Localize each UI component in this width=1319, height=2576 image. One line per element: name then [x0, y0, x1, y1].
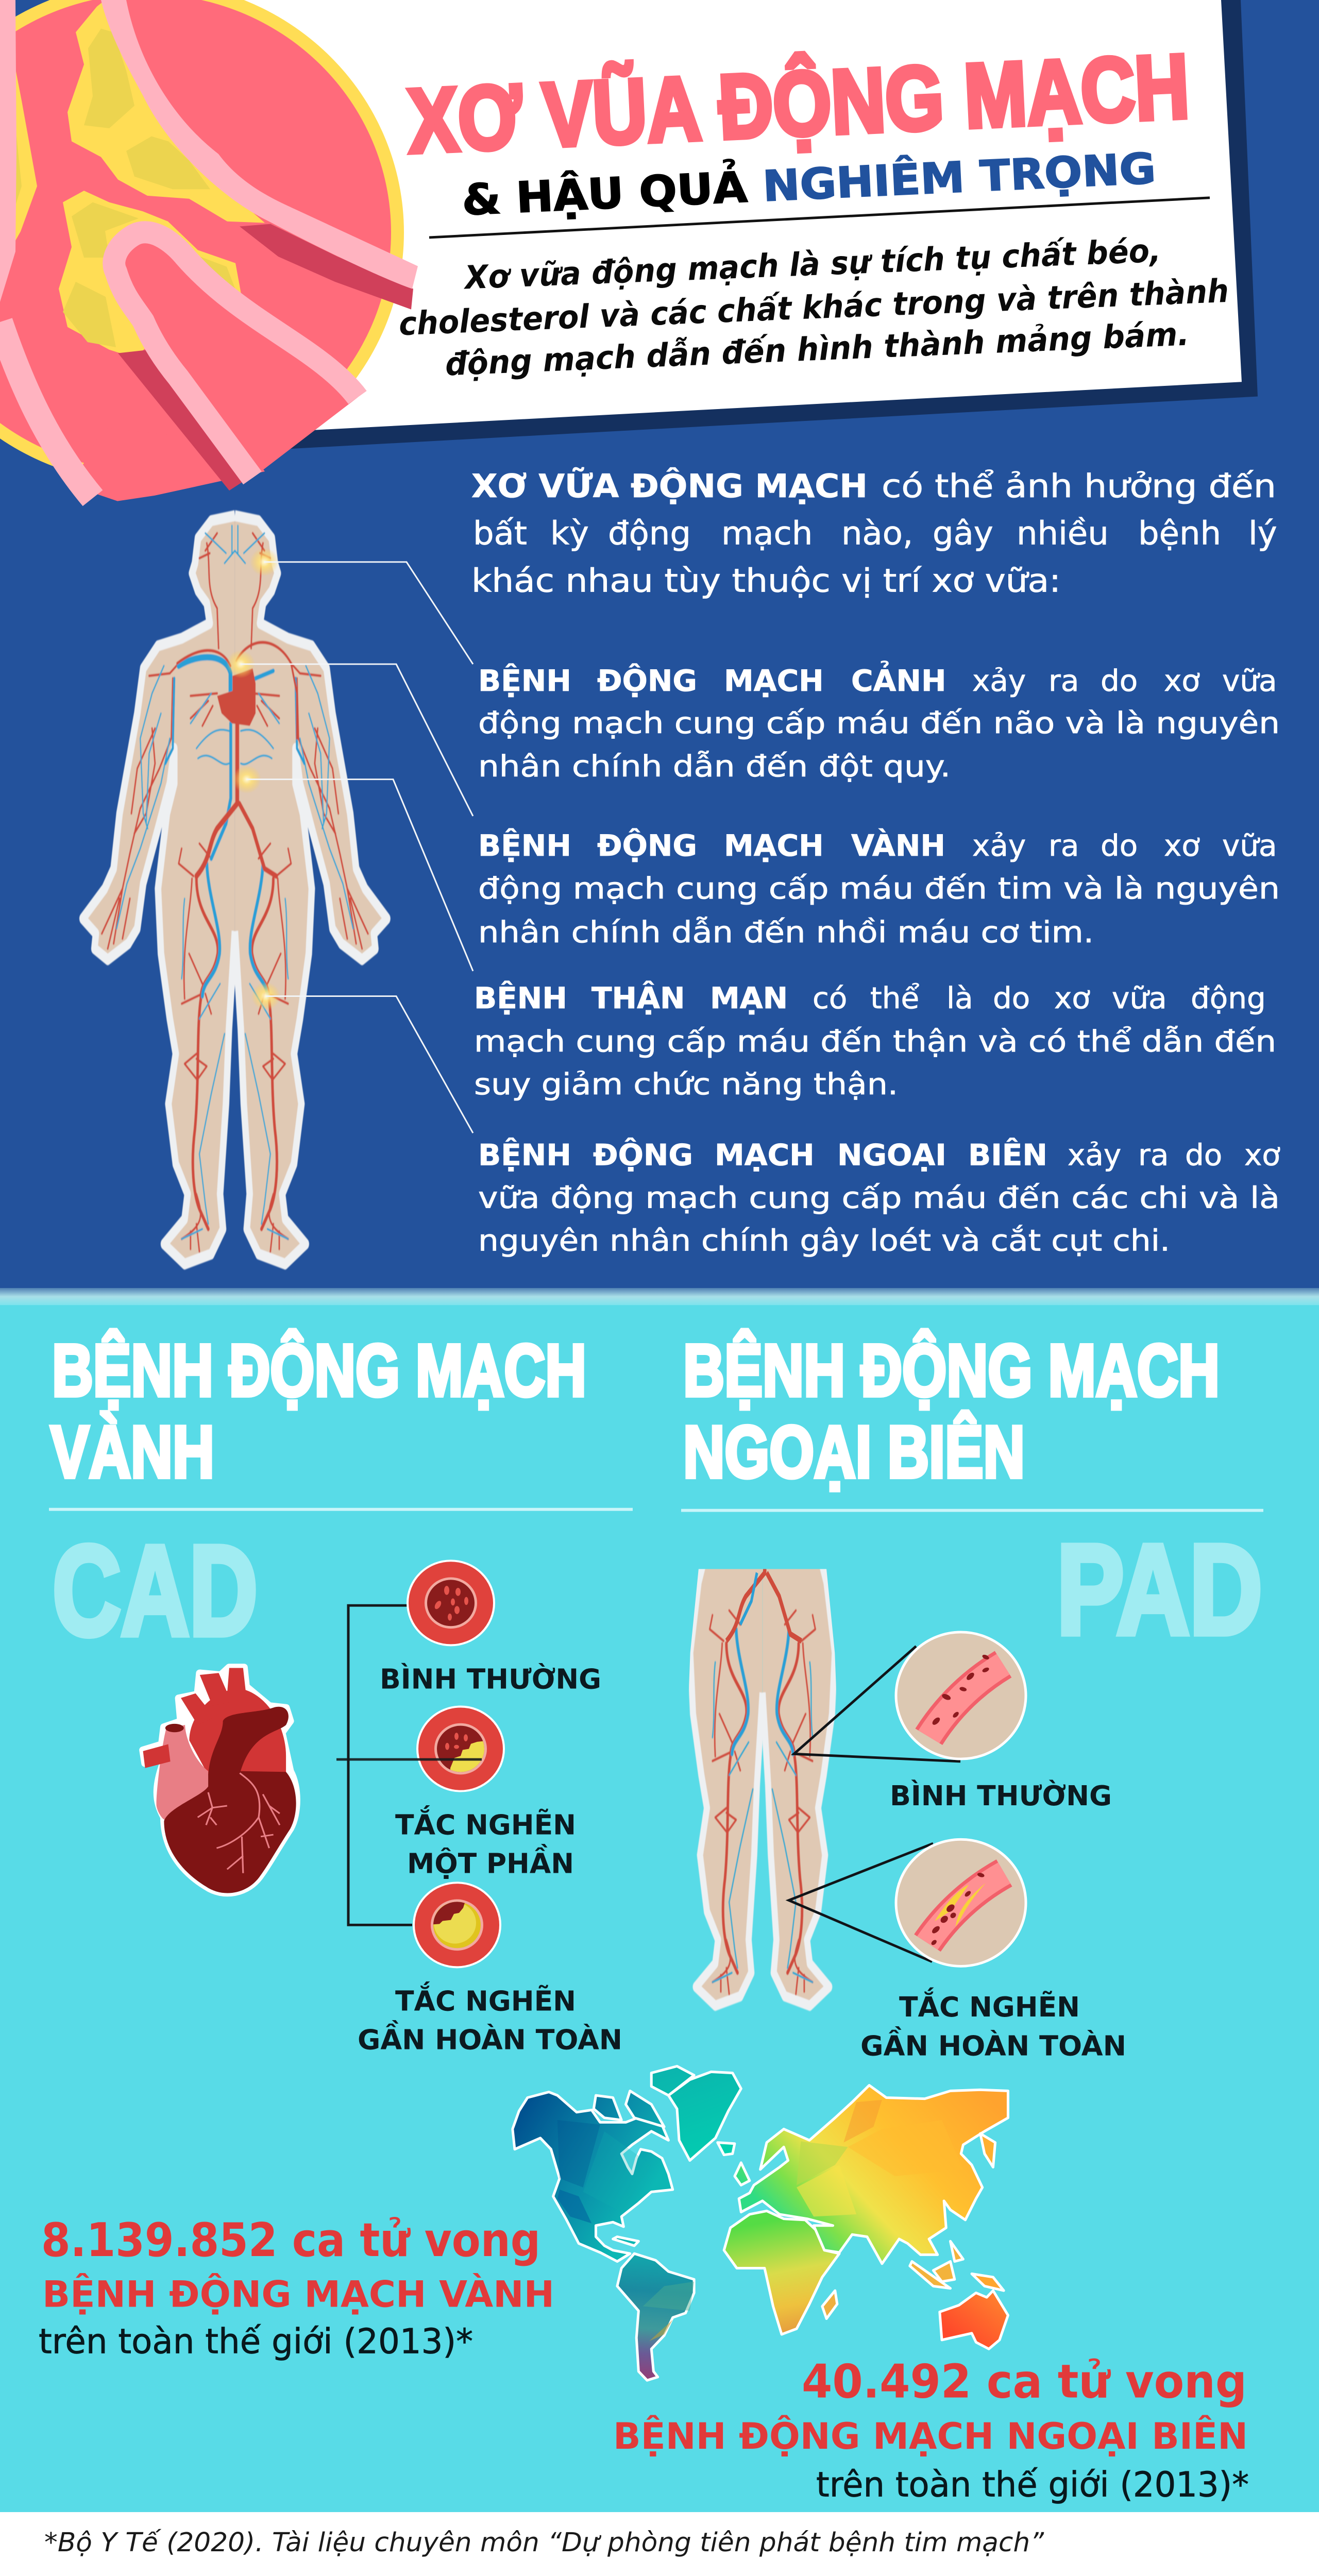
text block: peripheral artery disease: vữa động mạch cung cấp máu đến các chi và là	[478, 1181, 1280, 1215]
text block: intro paragraph: khác nhau tùy thuộc vị trí xơ vữa:	[471, 562, 1061, 599]
text block: renal artery disease: BỆNH	[474, 981, 567, 1015]
background: white footer band	[0, 2512, 1319, 2576]
text block: carotid artery disease: xảy	[972, 664, 1026, 698]
map: Southeast Asia islands	[910, 2241, 1004, 2291]
text block: renal artery disease: là	[946, 981, 973, 1015]
subtitle: & HẬU QUẢ NGHIÊM TRỌNG	[461, 139, 1157, 225]
text block: peripheral artery disease: do	[1185, 1138, 1222, 1173]
text block: carotid artery disease: nhân chính dẫn đến đột quy.	[478, 749, 951, 784]
stat: coronary deaths	[39, 2214, 554, 2361]
text block: intro paragraph: mạch	[721, 514, 813, 552]
label: near-total blockage (PAD): TẮC NGHẼN	[899, 1987, 1080, 2023]
stat: coronary deaths: 8.139.852 ca tử vong	[41, 2214, 540, 2267]
heading: peripheral artery disease	[683, 1329, 1220, 1493]
text block: intro paragraph: động	[608, 514, 691, 552]
zoom lines: legs to detail circles	[789, 1646, 960, 1962]
text block: peripheral artery disease: MẠCH	[715, 1138, 815, 1173]
stat: coronary deaths: trên toàn thế giới (2013)*	[39, 2321, 473, 2361]
icon: artery cross-section with plaque	[0, 0, 418, 501]
text block: renal artery disease: động	[1191, 981, 1266, 1015]
heading: peripheral artery disease: NGOẠI BIÊN	[683, 1411, 1025, 1493]
text block: renal artery disease: THẬN	[591, 981, 685, 1015]
text block: peripheral artery disease: NGOẠI	[837, 1138, 946, 1173]
text block: intro paragraph: kỳ	[550, 514, 589, 552]
text block: peripheral artery disease: BỆNH	[478, 1138, 571, 1173]
text block: carotid artery disease: xơ	[1164, 664, 1200, 698]
background: navy upper section	[0, 0, 1319, 1289]
label: near-total blockage (CAD): GẦN HOÀN TOÀN	[358, 2020, 622, 2056]
text block: intro paragraph	[471, 466, 1277, 599]
text block: intro paragraph: lý	[1248, 514, 1277, 552]
text block: renal artery disease: mạch cung cấp máu đến thận và có thể dẫn đến	[474, 1025, 1276, 1059]
text block: coronary artery disease: VÀNH	[851, 828, 945, 863]
stat: peripheral deaths	[613, 2355, 1249, 2505]
text block: carotid artery disease: do	[1101, 664, 1138, 698]
text block: peripheral artery disease: ĐỘNG	[593, 1138, 693, 1173]
intro text block: cholesterol và các chất khác trong và trên thành	[398, 272, 1229, 343]
detail circle: blocked peripheral artery	[896, 1839, 1026, 1966]
text block: carotid artery disease: vữa	[1222, 664, 1277, 698]
intro text block	[398, 231, 1229, 383]
text block: intro paragraph: bệnh	[1138, 514, 1221, 552]
map: Africa	[724, 2211, 839, 2334]
text block: coronary artery disease	[478, 828, 1280, 950]
text block: carotid artery disease: động mạch cung cấp máu đến não và là nguyên	[478, 706, 1280, 740]
label: near-total blockage (CAD): TẮC NGHẼN	[395, 1981, 576, 2017]
cross-section: nearly fully blocked artery	[414, 1883, 500, 1967]
header white panel	[155, 0, 1242, 443]
anatomy figure: human body with vessels	[82, 516, 387, 1264]
text block: coronary artery disease: vữa	[1222, 829, 1277, 863]
map: Eurasia	[735, 2086, 1008, 2264]
text block: intro paragraph: có thể ảnh hưởng đến	[882, 467, 1276, 505]
label: partial blockage: MỘT PHẦN	[407, 1843, 574, 1880]
text block: coronary artery disease: động mạch cung cấp máu đến tim và là nguyên	[478, 872, 1280, 906]
map: Greenland and Iceland	[651, 2066, 741, 2160]
text block: intro paragraph: XƠ VỮA ĐỘNG MẠCH	[471, 466, 868, 505]
text block: peripheral artery disease: BIÊN	[968, 1138, 1047, 1173]
text block: renal artery disease: xơ	[1054, 981, 1090, 1015]
watermark: PAD: PAD	[1057, 1519, 1262, 1661]
label: near-total blockage (CAD)	[358, 1981, 622, 2056]
text block: peripheral artery disease: xảy	[1068, 1138, 1121, 1173]
text block: intro paragraph: gây	[933, 514, 993, 552]
stat: coronary deaths: BỆNH ĐỘNG MẠCH VÀNH	[42, 2273, 554, 2315]
text block: carotid artery disease: CẢNH	[851, 661, 946, 698]
text block: carotid artery disease: MẠCH	[724, 664, 824, 698]
label: near-total blockage (PAD)	[860, 1987, 1126, 2062]
heading: coronary artery disease: BỆNH ĐỘNG MẠCH	[52, 1329, 586, 1412]
text block: renal artery disease: vữa	[1112, 981, 1167, 1015]
text block: peripheral artery disease	[478, 1138, 1280, 1258]
world map	[513, 2066, 1008, 2380]
stat: peripheral deaths: trên toàn thế giới (2013)*	[816, 2465, 1249, 2505]
text block: coronary artery disease: nhân chính dẫn đến nhồi máu cơ tim.	[478, 916, 1094, 950]
text block: intro paragraph: nhiều	[1017, 514, 1109, 552]
label: partial blockage: TẮC NGHẼN	[395, 1805, 576, 1841]
cross-section: partially blocked artery	[417, 1706, 504, 1791]
text block: coronary artery disease: do	[1101, 829, 1138, 863]
text block: peripheral artery disease: nguyên nhân chính gây loét và cắt cụt chi.	[478, 1224, 1170, 1258]
text block: coronary artery disease: ra	[1049, 829, 1079, 863]
text block: renal artery disease: do	[993, 981, 1030, 1015]
text block: coronary artery disease: ĐỘNG	[597, 829, 697, 863]
text block: coronary artery disease: xơ	[1164, 829, 1200, 863]
map: North America	[513, 2091, 673, 2261]
text block: peripheral artery disease: xơ	[1244, 1138, 1280, 1173]
text block: carotid artery disease: BỆNH	[478, 664, 571, 698]
footnote: *Bộ Y Tế (2020). Tài liệu chuyên môn “Dự phòng tiên phát bệnh tim mạch”	[44, 2528, 1044, 2558]
text block: renal artery disease: thể	[870, 981, 919, 1015]
text block: intro paragraph: nào,	[841, 514, 913, 552]
heading: coronary artery disease	[50, 1329, 586, 1493]
highlight points and connector lines	[226, 548, 473, 1133]
map: Australia	[940, 2291, 1008, 2349]
text block: renal artery disease: có	[813, 981, 847, 1015]
label: normal (CAD): BÌNH THƯỜNG	[380, 1662, 601, 1695]
label: near-total blockage (PAD): GẦN HOÀN TOÀN	[860, 2026, 1126, 2062]
watermark: CAD: CAD	[53, 1520, 258, 1662]
stat: peripheral deaths: 40.492 ca tử vong	[802, 2355, 1247, 2409]
intro text block: Xơ vữa động mạch là sự tích tụ chất béo,	[462, 231, 1162, 297]
intro text block: động mạch dẫn đến hình thành mảng bám.	[445, 315, 1190, 383]
text block: coronary artery disease: MẠCH	[724, 829, 824, 863]
stat: peripheral deaths: BỆNH ĐỘNG MẠCH NGOẠI BIÊN	[613, 2415, 1248, 2458]
text block: carotid artery disease	[478, 661, 1280, 784]
text block: coronary artery disease: BỆNH	[478, 829, 571, 863]
text block: intro paragraph: bất	[473, 514, 527, 552]
label: partial blockage	[395, 1805, 576, 1880]
header panel shadow	[278, 0, 1258, 449]
text block: carotid artery disease: ĐỘNG	[597, 664, 697, 698]
text block: renal artery disease	[474, 981, 1276, 1101]
text block: carotid artery disease: ra	[1049, 664, 1079, 698]
cross-section: normal artery	[408, 1561, 494, 1645]
detail circle: normal peripheral artery	[896, 1632, 1026, 1759]
text block: coronary artery disease: xảy	[972, 829, 1026, 863]
map: South America	[617, 2253, 694, 2380]
label: normal (PAD): BÌNH THƯỜNG	[890, 1779, 1112, 1812]
figure: legs with vessels	[619, 1302, 906, 2006]
text block: renal artery disease: MẠN	[710, 981, 788, 1015]
text block: peripheral artery disease: ra	[1138, 1138, 1169, 1173]
background: cyan lower section	[0, 1303, 1319, 2512]
icon: heart	[143, 1667, 296, 1893]
text block: renal artery disease: suy giảm chức năng thận.	[474, 1067, 898, 1101]
bracket connector: heart to cross-sections	[348, 1605, 412, 1925]
heading: coronary artery disease: VÀNH	[50, 1411, 214, 1493]
